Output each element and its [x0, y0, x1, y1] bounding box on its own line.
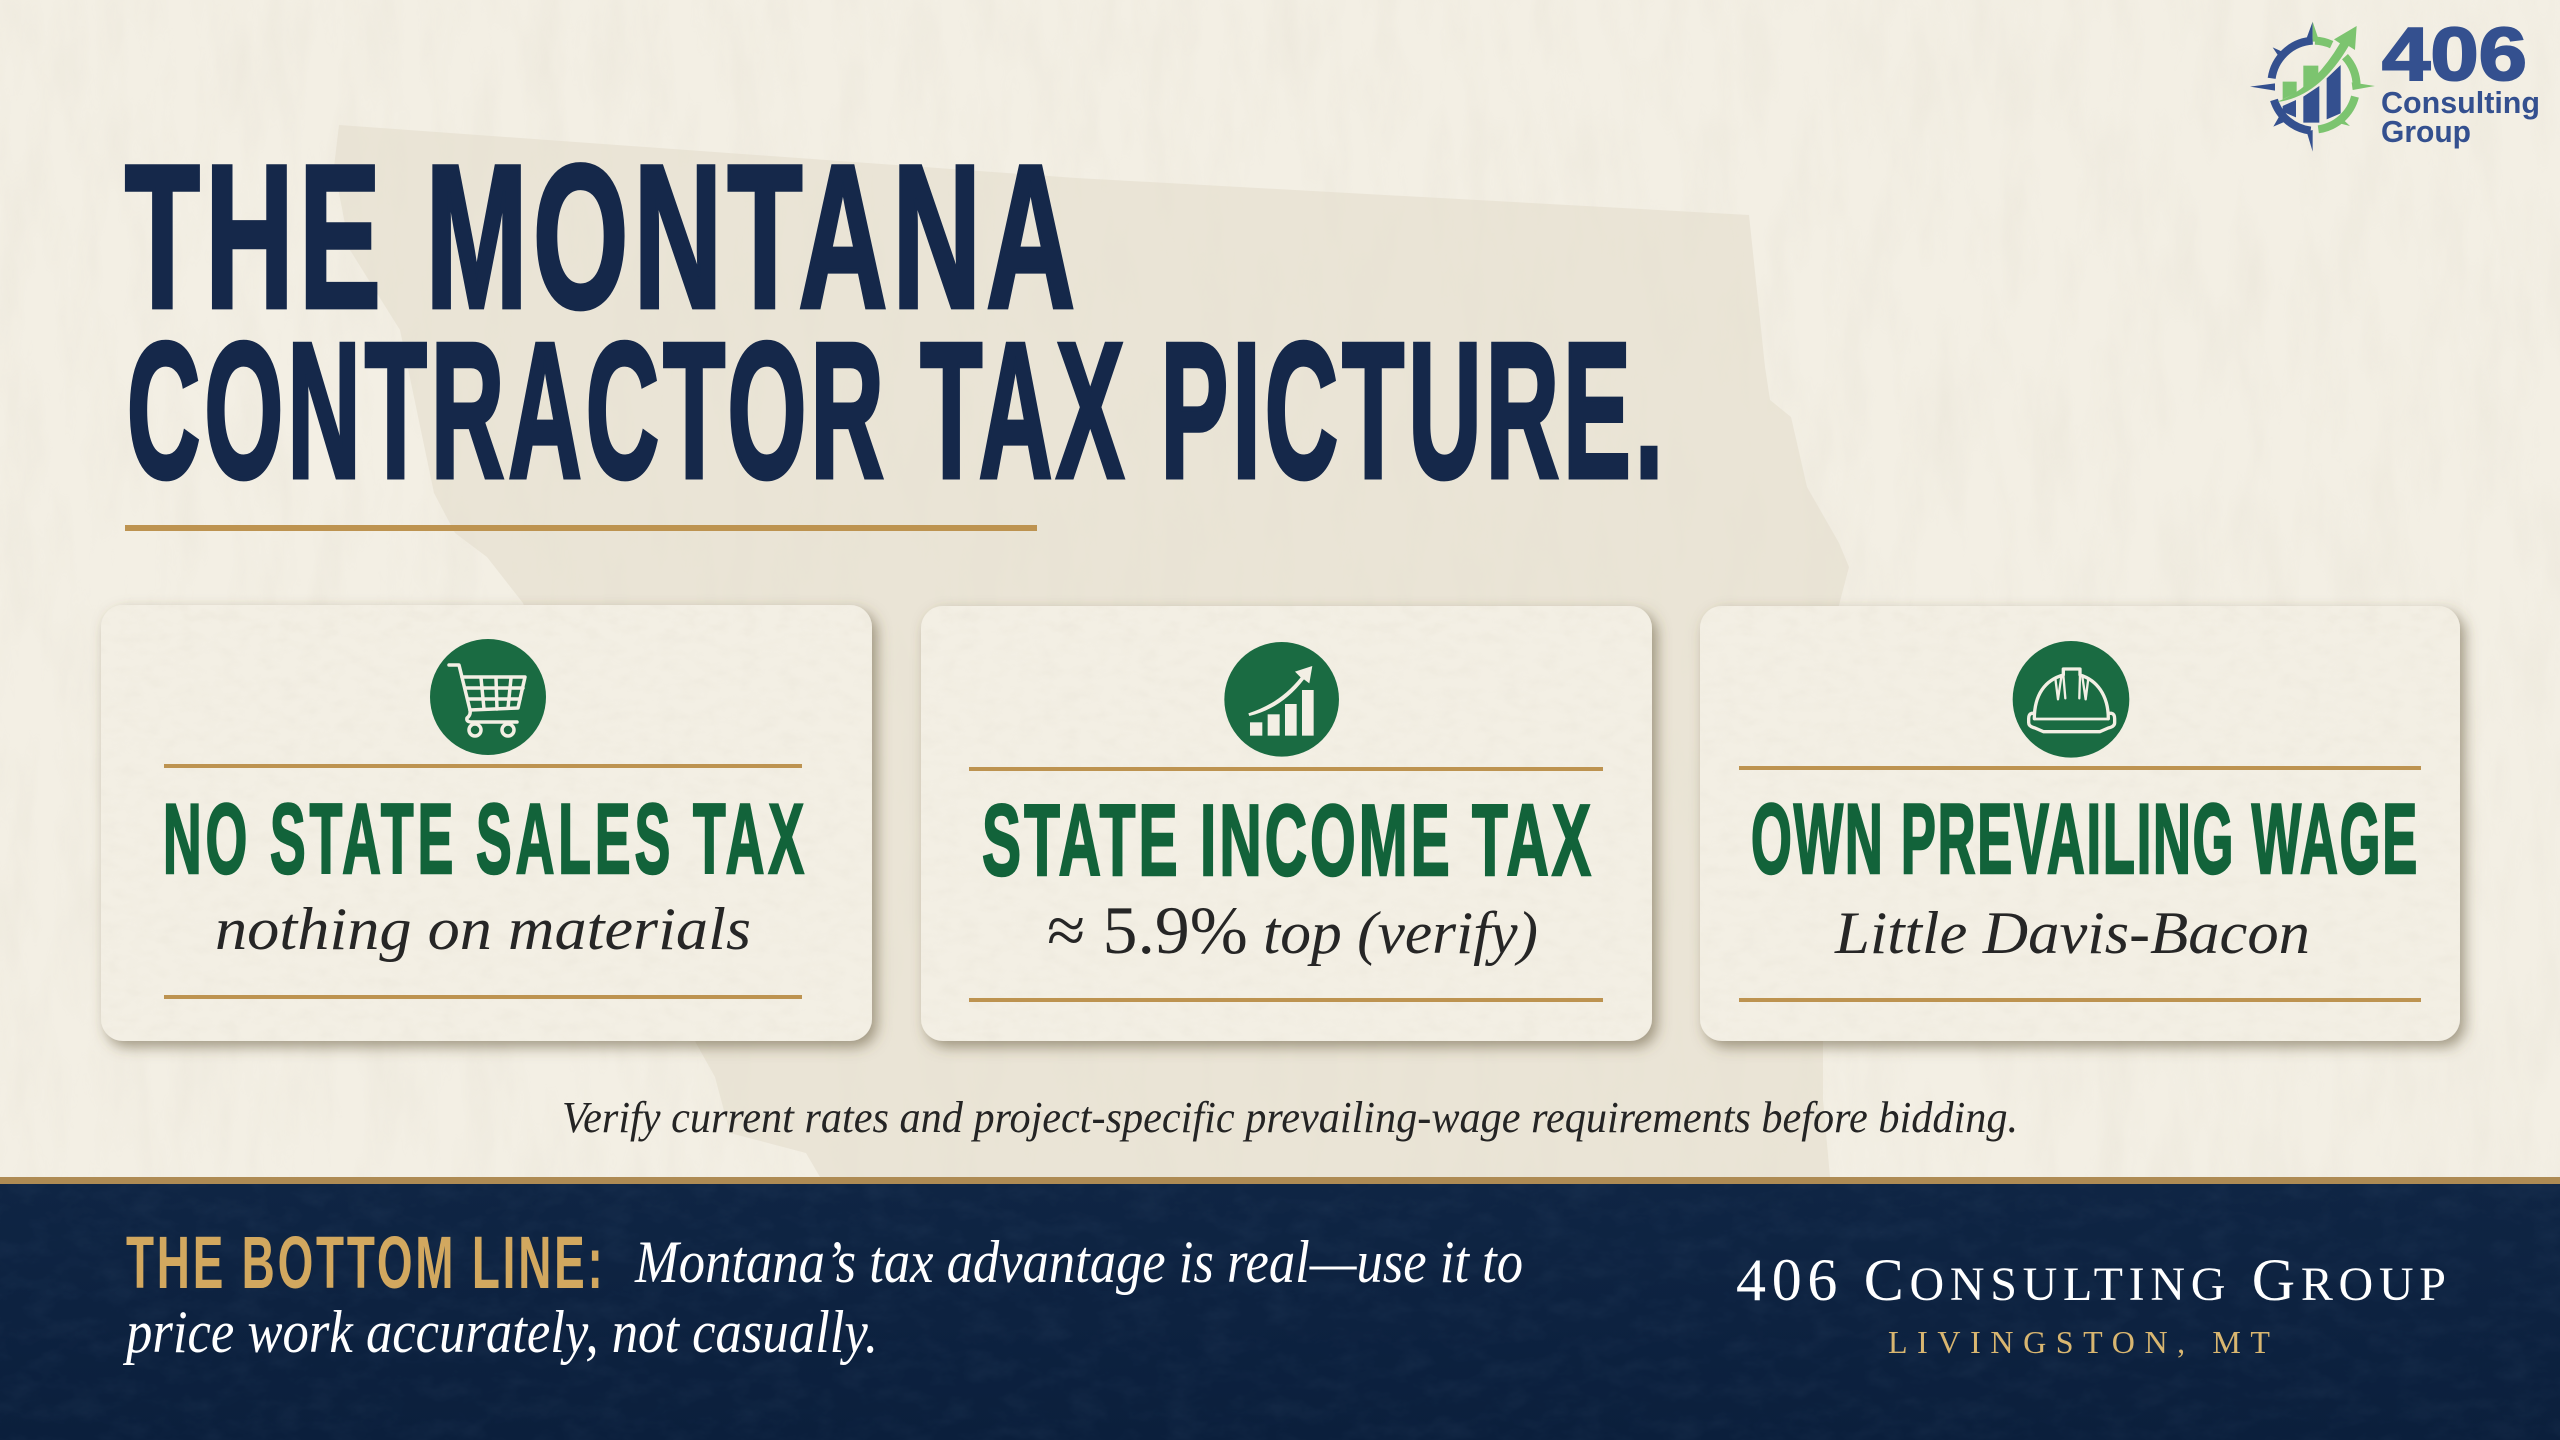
logo wordmark — [2381, 12, 2540, 149]
logo wordmark: 406 — [2382, 12, 2527, 96]
subtext: nothing on materials: nothing on materials — [215, 896, 751, 962]
title: CONTRACTOR TAX PICTURE. — [127, 302, 1663, 518]
footer band — [0, 1177, 2560, 1440]
panel: state income tax — [921, 606, 1652, 1041]
title — [125, 123, 1663, 518]
icon: shopping cart — [430, 639, 546, 755]
Montana state silhouette watermark — [334, 125, 1849, 1177]
logo wordmark: Consulting — [2381, 85, 2540, 120]
title: THE MONTANA — [125, 123, 1075, 351]
icon: hard hat — [2013, 641, 2129, 758]
logo wordmark: Group — [2381, 114, 2471, 149]
icon: rising bar chart — [1224, 642, 1339, 757]
subtext: approx 5.9% top (verify): ≈ 5.9% top (verify) — [1047, 892, 1538, 968]
title gold rule — [125, 525, 1037, 531]
bottom line message — [122, 1229, 1523, 1365]
company location: LIVINGSTON, MT — [1888, 1324, 2280, 1360]
verification note: Verify current rates and project-specific prevailing-wage requirements before bidding. — [562, 1093, 2018, 1142]
subtext: little davis-bacon: Little Davis-Bacon — [1834, 900, 2310, 966]
bottom line message: price work accurately, not casually. — [122, 1299, 878, 1365]
bottom line message: Montana’s tax advantage is real—use it to — [634, 1229, 1523, 1295]
heading: own prevailing wage: OWN PREVAILING WAGE — [1751, 783, 2417, 894]
heading: no state sales tax: NO STATE SALES TAX — [163, 783, 804, 894]
bottom line label: THE BOTTOM LINE: — [126, 1222, 603, 1305]
heading: state income tax: STATE INCOME TAX — [982, 784, 1591, 897]
icon: compass with chart — [2250, 22, 2375, 152]
panel: own prevailing wage — [1700, 606, 2460, 1041]
panel: no state sales tax — [101, 605, 872, 1041]
company name: 406 CONSULTING GROUP — [1736, 1247, 2452, 1313]
logo: 406 Consulting Group — [2250, 12, 2540, 152]
